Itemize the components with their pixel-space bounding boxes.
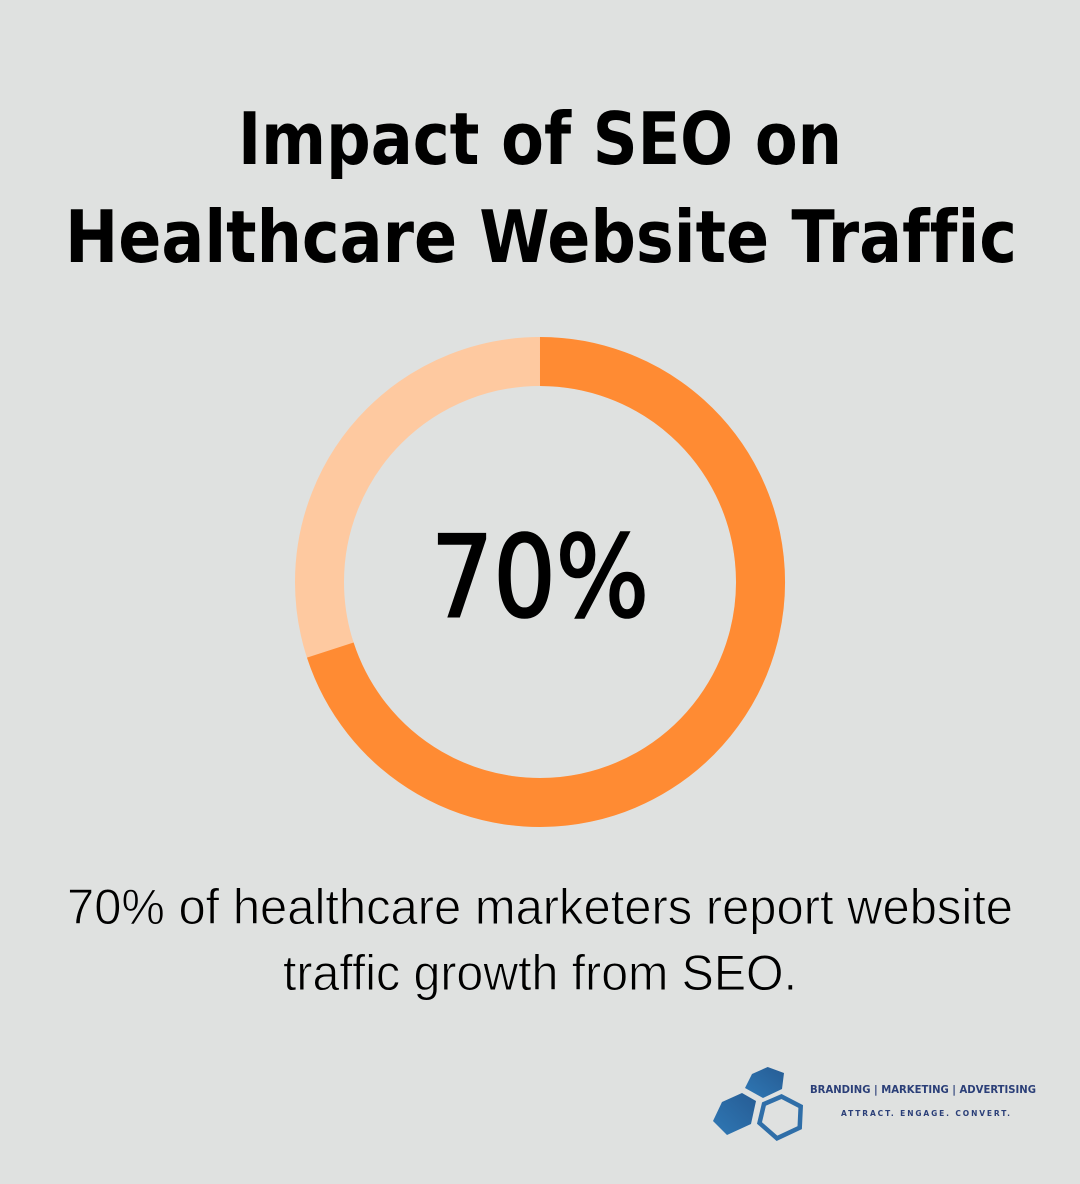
- logo tagline text: BRANDING | MARKETING | ADVERTISING: [810, 1083, 1036, 1096]
- logo: [713, 1067, 1036, 1138]
- title: Impact of SEO on: [238, 97, 842, 181]
- logo tagline text: ATTRACT. ENGAGE. CONVERT.: [841, 1109, 1010, 1118]
- description text: traffic growth from SEO.: [283, 945, 797, 1001]
- donut chart: 70 percent: [320, 362, 761, 802]
- title: [65, 97, 1017, 279]
- description text: 70% of healthcare marketers report website: [67, 879, 1013, 935]
- donut center value: 70%: [431, 513, 649, 643]
- icon: hexagons: [713, 1067, 801, 1138]
- logo tagline text: [810, 1083, 1036, 1118]
- description text: [67, 879, 1013, 1001]
